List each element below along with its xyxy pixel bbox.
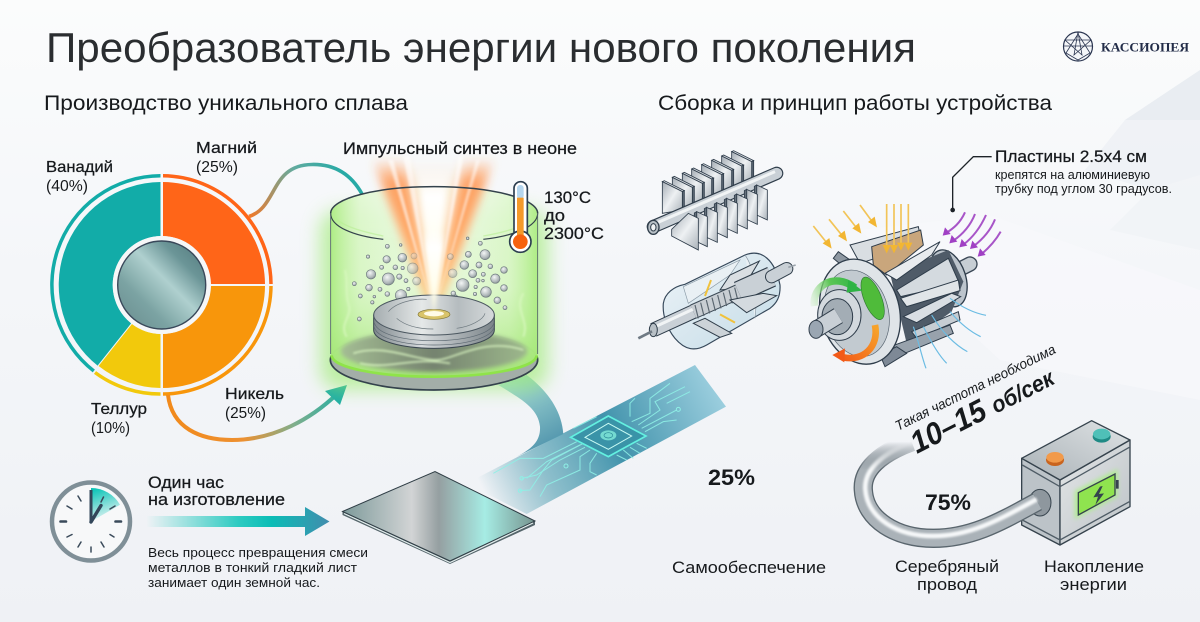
- label: nickel: (25%): [225, 405, 266, 422]
- icon: charge indicator: [1077, 473, 1119, 515]
- segment: vanadium 40%: [52, 176, 160, 371]
- heading: impulse synthesis: Импульсный синтез в неоне: [343, 140, 577, 158]
- arrow: time to plate: [146, 507, 330, 536]
- description: process: занимает один земной час.: [148, 575, 320, 590]
- circuit ribbon: [467, 365, 726, 514]
- label: nickel: Никель: [225, 386, 284, 403]
- label: energy storage: энергии: [1060, 575, 1127, 594]
- logo: Кассиопея: [1064, 32, 1190, 61]
- flame jet: [372, 157, 495, 317]
- arrows: blue output: [913, 298, 986, 368]
- label: self-sufficiency: Самообеспечение: [672, 558, 826, 577]
- silver wire: [863, 442, 1037, 538]
- glass body: [330, 187, 538, 390]
- title: Преобразователь энергии нового поколения: [46, 24, 916, 71]
- plates: [693, 261, 759, 337]
- yellow force marks: [705, 280, 735, 323]
- callout: plates: крепятся на алюминиевую: [995, 168, 1150, 182]
- label: vanadium: Ванадий: [46, 159, 113, 176]
- description: process: металлов в тонкий гладкий лист: [148, 560, 357, 575]
- label: magnesium: (25%): [196, 159, 238, 176]
- metal droplets: [352, 237, 507, 321]
- alloy sample disc: [113, 236, 211, 334]
- label: vanadium: (40%): [46, 178, 88, 195]
- callout: plates: Пластины 2.5x4 см: [995, 148, 1147, 166]
- label: energy storage: [1044, 557, 1144, 594]
- frequency: rotated note: 10–15 об/сек: [904, 358, 1060, 460]
- terminal: teal: [1093, 429, 1111, 443]
- metal plate: [342, 472, 535, 564]
- label: nickel: [225, 386, 284, 422]
- icon: microchip: [571, 416, 646, 457]
- terminal: orange: [1046, 452, 1064, 466]
- label: tellurium: [91, 401, 147, 437]
- illustration: main rotor: [808, 204, 1001, 373]
- callout: plates: трубку под углом 30 градусов.: [995, 182, 1172, 196]
- temperature range: 2300°C: [544, 224, 604, 243]
- heading: one hour: на изготовление: [148, 490, 285, 509]
- glass shell: [663, 253, 780, 349]
- label: tellurium: (10%): [91, 420, 130, 437]
- stat: 25%: 25%: [708, 465, 755, 490]
- label: magnesium: Магний: [196, 140, 257, 157]
- segment: tellurium 10%: [95, 324, 160, 394]
- rotor fins: [833, 227, 961, 367]
- heading: alloy production: Производство уникального сплава: [44, 92, 408, 115]
- heading: one hour: Один час: [148, 473, 225, 492]
- top rim: [331, 187, 538, 213]
- connector: furnace to ribbon: [498, 375, 563, 457]
- temperature range: [544, 188, 604, 243]
- arrow: orange rotation: [832, 325, 876, 362]
- label: energy storage: Накопление: [1044, 557, 1144, 576]
- frequency: rotated note: Такая частота необходима: [892, 341, 1058, 434]
- callout: plates: [950, 148, 1172, 212]
- rotor core: [890, 250, 963, 343]
- metal disc target: [374, 230, 494, 348]
- arrows: purple input: [947, 212, 1001, 254]
- label: tellurium: Теллур: [91, 401, 147, 418]
- label: magnesium: [196, 140, 257, 176]
- front shaft: [809, 316, 838, 338]
- wire connector: [1029, 489, 1051, 516]
- logo: Кассиопея: КАССИОПЕЯ: [1101, 40, 1190, 54]
- illustration: finned tube: [648, 151, 777, 250]
- label: silver wire: провод: [917, 575, 977, 594]
- front plate: [730, 293, 777, 313]
- segment: nickel 25%: [163, 286, 271, 394]
- rear hub: [923, 245, 974, 312]
- label: vanadium: [46, 159, 113, 195]
- temperature range: 130°C: [544, 188, 591, 207]
- heading: assembly: Сборка и принцип работы устройства: [658, 92, 1052, 115]
- segment: magnesium 25%: [163, 176, 271, 284]
- icon: thermometer: [510, 182, 531, 252]
- illustration: wound rotor in glass: [638, 253, 796, 349]
- label: silver wire: [895, 557, 999, 594]
- furnace: glass cylinder: [320, 157, 548, 390]
- arrow: magnesium to furnace: [249, 164, 362, 216]
- twisted wire: [693, 288, 738, 318]
- arrows: solar input: [813, 204, 908, 248]
- temperature range: до: [544, 206, 565, 225]
- pie chart: alloy composition: [52, 176, 271, 394]
- inner shaft: [653, 312, 693, 330]
- stat: 75%: 75%: [925, 490, 971, 515]
- front disc: [808, 250, 912, 373]
- description: process: [148, 545, 368, 590]
- icon: clock: [52, 482, 130, 560]
- description: process: Весь процесс превращения смеси: [148, 545, 368, 560]
- heading: one hour: [148, 473, 285, 509]
- battery: [1022, 421, 1130, 545]
- label: silver wire: Серебряный: [895, 557, 999, 576]
- rear shaft: [955, 264, 970, 272]
- arrow: green rotation: [814, 280, 862, 306]
- outer shaft: [738, 277, 772, 292]
- arrow: nickel to furnace: [168, 385, 347, 440]
